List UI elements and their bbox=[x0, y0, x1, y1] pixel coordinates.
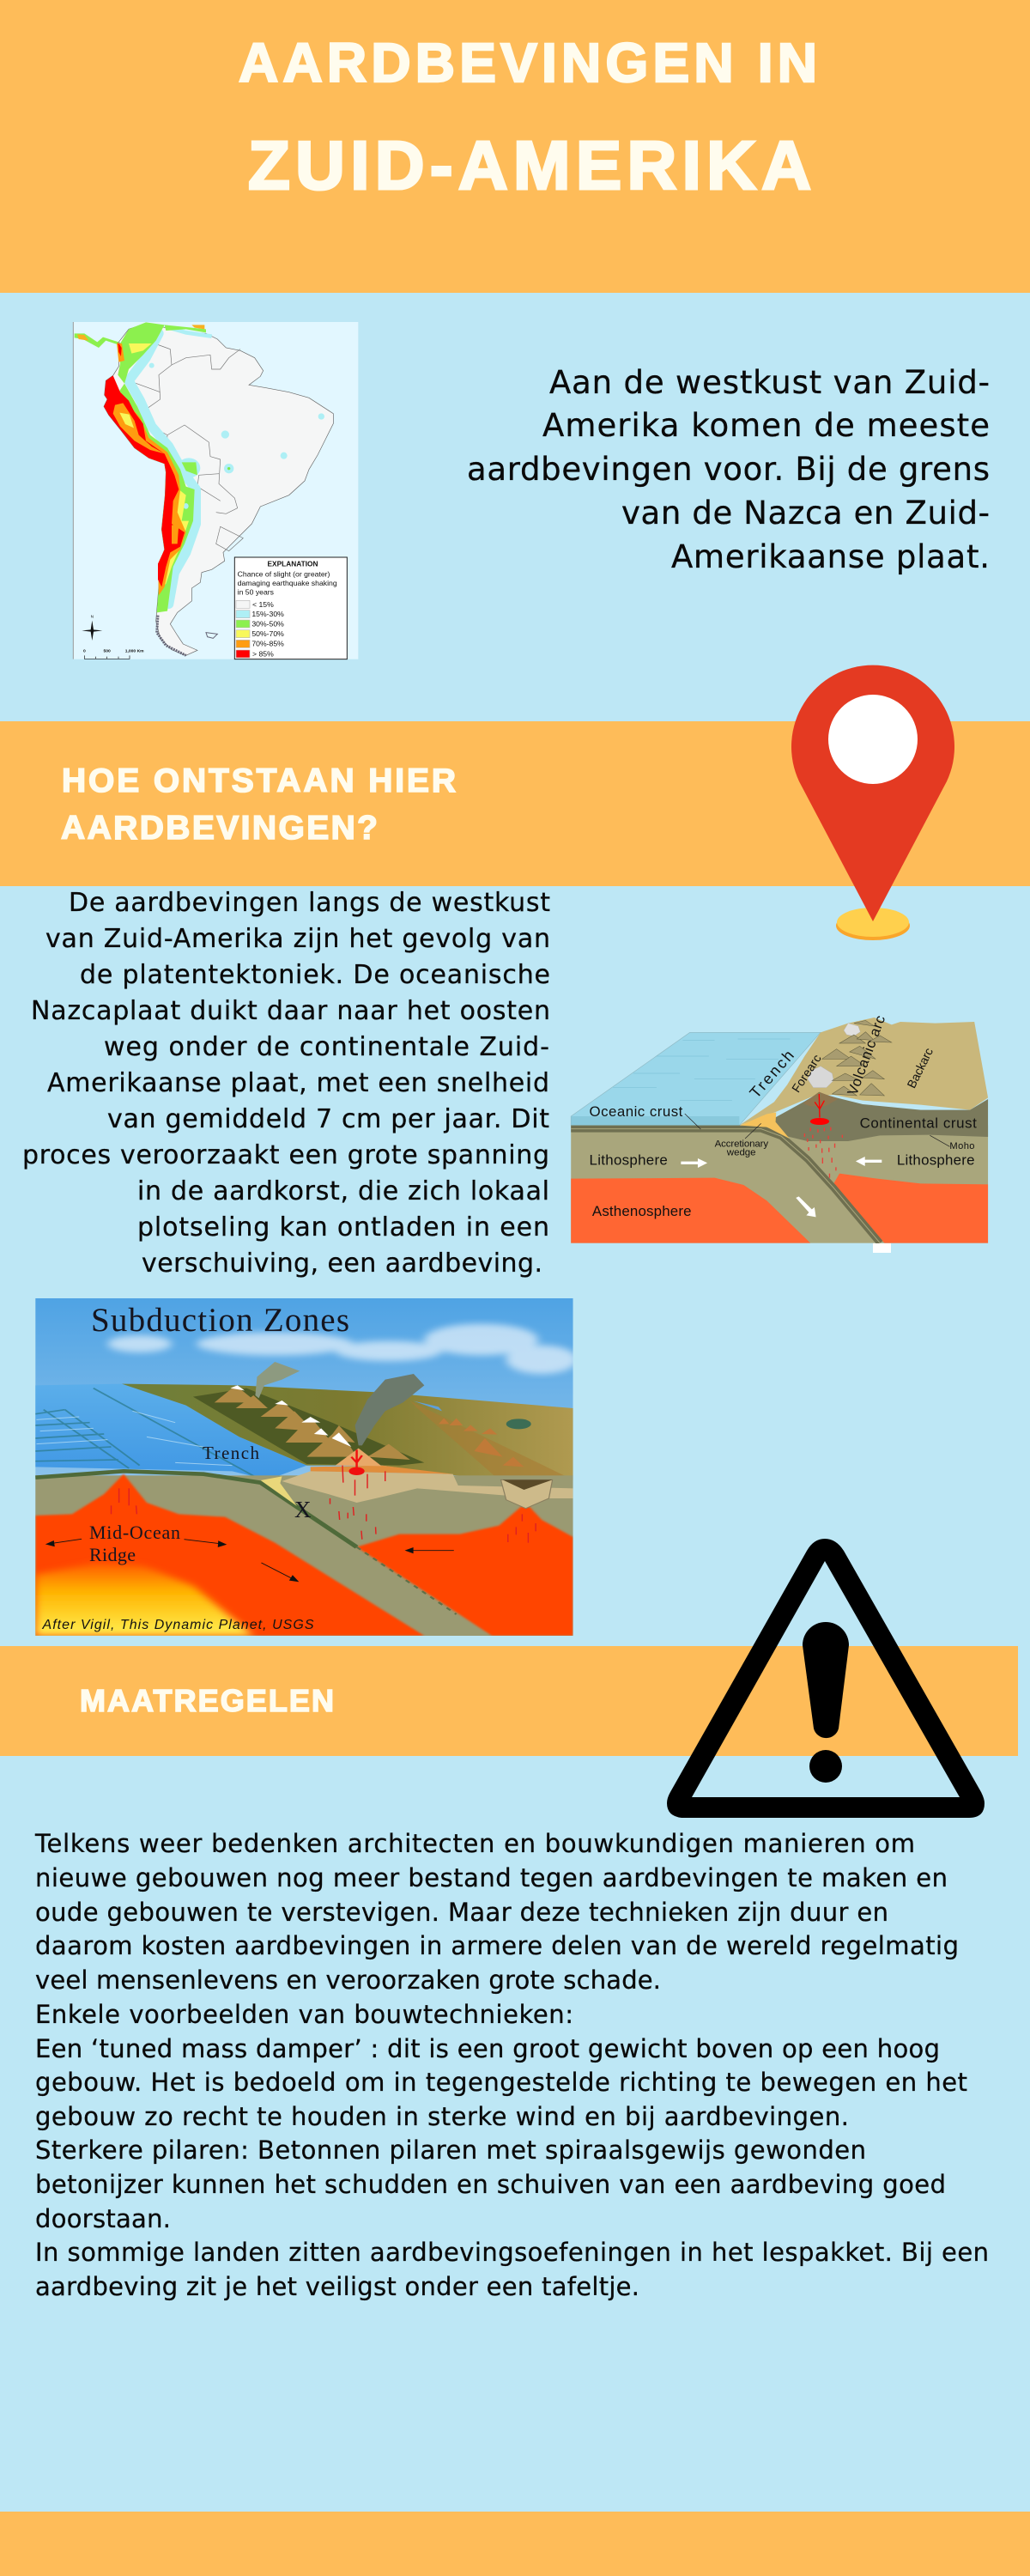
icon: location pin bbox=[791, 665, 954, 940]
volcano cone bbox=[336, 1449, 382, 1466]
hot mantle left bbox=[35, 1474, 424, 1636]
illustration labels: Ridge bbox=[89, 1544, 136, 1565]
scale bar bbox=[83, 649, 144, 659]
illustration labels: Trench bbox=[203, 1443, 259, 1463]
subduction cross-section diagram bbox=[571, 1013, 988, 1243]
mantle bbox=[35, 1475, 573, 1636]
legend box bbox=[234, 557, 347, 659]
legend box: 15%-30% bbox=[251, 610, 284, 618]
explanation paragraph: van gemiddeld 7 cm per jaar. Dit bbox=[107, 1104, 549, 1134]
header band bbox=[0, 0, 1030, 293]
ocean ridge grid bbox=[35, 1388, 261, 1479]
accretionary wedge bbox=[740, 1112, 790, 1139]
compass bbox=[82, 614, 102, 641]
intro paragraph: aardbevingen voor. Bij de grens bbox=[467, 451, 990, 488]
diagram labels: Lithosphere bbox=[590, 1152, 668, 1169]
ash clouds bbox=[808, 1066, 833, 1088]
title line 1: AARDBEVINGEN IN bbox=[239, 32, 817, 94]
continent surface bbox=[739, 1018, 988, 1126]
diagram labels: Asthenosphere bbox=[592, 1203, 692, 1219]
mountains bbox=[822, 1020, 892, 1096]
measures paragraph: daarom kosten aardbevingen in armere delen van de wereld regelmatig bbox=[35, 1931, 959, 1960]
clouds bbox=[107, 1324, 578, 1374]
mountain range bbox=[193, 1388, 424, 1466]
section heading: AARDBEVINGEN? bbox=[61, 810, 378, 847]
title line 2: ZUID-AMERIKA bbox=[248, 127, 811, 204]
cones on back-arc plain bbox=[439, 1419, 524, 1467]
white arrows bbox=[681, 1157, 882, 1217]
lithosphere bbox=[571, 1126, 988, 1243]
measures paragraph: In sommige landen zitten aardbevingsoefeningen in het lespakket. Bij een bbox=[35, 2238, 989, 2267]
seismic hazard map of South America bbox=[73, 322, 358, 659]
intro paragraph bbox=[467, 364, 990, 575]
volcanic plumes bbox=[355, 1374, 424, 1445]
accretionary wedge bbox=[261, 1476, 297, 1506]
intro paragraph: Aan de westkust van Zuid- bbox=[549, 364, 990, 401]
legend box: EXPLANATION bbox=[267, 560, 318, 568]
measures paragraph: nieuwe gebouwen nog meer bestand tegen aardbevingen te maken en bbox=[35, 1863, 948, 1893]
measures paragraph: gebouw. Het is bedoeld om in tegengestelde richting te bewegen en het bbox=[35, 2068, 967, 2097]
diagram labels: Lithosphere bbox=[897, 1152, 975, 1169]
diagram labels: Oceanic crust bbox=[590, 1103, 683, 1120]
measures paragraph: aardbeving zit je het veiligst onder een tafeltje. bbox=[35, 2272, 639, 2301]
section heading: MAATREGELEN bbox=[80, 1683, 334, 1718]
section band: hoe ontstaan bbox=[0, 721, 1030, 886]
diagram labels: Backarc bbox=[904, 1046, 936, 1091]
yellow zones bbox=[129, 343, 152, 354]
diagram labels: Trench bbox=[746, 1047, 797, 1102]
Patagonian fragments bbox=[157, 616, 186, 655]
volcano bbox=[803, 1092, 838, 1106]
legend box: > 85% bbox=[252, 650, 274, 659]
land bbox=[104, 324, 333, 655]
cyan halo bbox=[129, 333, 196, 604]
country borders bbox=[129, 343, 243, 551]
section heading bbox=[61, 762, 456, 847]
scale bar: 1,000 Km bbox=[125, 649, 144, 654]
explanation paragraph: verschuiving, een aardbeving. bbox=[142, 1249, 542, 1279]
icon: warning triangle bbox=[667, 1539, 985, 1818]
green zones bbox=[118, 322, 165, 384]
scale bar: 0 bbox=[83, 649, 86, 654]
intro paragraph: Amerika komen de meeste bbox=[542, 407, 990, 444]
measures paragraph: doorstaan. bbox=[35, 2204, 171, 2233]
asthenosphere bbox=[571, 1178, 810, 1243]
land bbox=[122, 1384, 573, 1479]
section band: maatregelen bbox=[0, 1646, 1018, 1756]
explanation paragraph: Amerikaanse plaat, met een snelheid bbox=[47, 1068, 549, 1098]
measures paragraph: Een ‘tuned mass damper’ : dit is een groot gewicht boven op een hoog bbox=[35, 2034, 940, 2063]
diagram labels: Moho bbox=[949, 1141, 975, 1151]
diagram labels: Forearc bbox=[789, 1052, 824, 1095]
compass: N bbox=[91, 614, 94, 618]
legend box: Chance of slight (or greater) bbox=[238, 569, 330, 578]
small white rectangle under diagram bbox=[873, 1243, 891, 1253]
continental crust bbox=[775, 1093, 988, 1141]
illustration labels: After Vigil, This Dynamic Planet, USGS bbox=[41, 1618, 314, 1632]
measures paragraph: gebouw zo recht te houden in sterke wind en bij aardbevingen. bbox=[35, 2102, 849, 2131]
explanation paragraph: weg onder de continentale Zuid- bbox=[104, 1032, 549, 1062]
diagram labels bbox=[590, 1013, 977, 1219]
measures paragraph: betonijzer kunnen het schudden en schuiven van een aardbeving goed bbox=[35, 2170, 946, 2199]
legend box: 70%-85% bbox=[251, 640, 284, 648]
diagram labels: Volcanic arc bbox=[844, 1013, 888, 1097]
illustration labels: X bbox=[294, 1497, 312, 1522]
illustration labels: Mid-Ocean bbox=[89, 1522, 180, 1543]
section heading: HOE ONTSTAAN HIER bbox=[62, 762, 456, 799]
crust strip bbox=[35, 1471, 357, 1547]
scale bar: 500 bbox=[104, 649, 111, 654]
oceanic crust strip bbox=[571, 1129, 880, 1243]
measures paragraph: Enkele voorbeelden van bouwtechnieken: bbox=[35, 2000, 573, 2029]
explanation paragraph: proces veroorzaakt een grote spanning bbox=[22, 1140, 549, 1170]
footer band bbox=[0, 2512, 1030, 2576]
illustration labels bbox=[41, 1302, 349, 1632]
explanation paragraph: De aardbevingen langs de westkust bbox=[69, 888, 550, 918]
illustration labels: Subduction Zones bbox=[91, 1302, 349, 1339]
legend box: 30%-50% bbox=[251, 619, 284, 628]
explanation paragraph: van Zuid-Amerika zijn het gevolg van bbox=[45, 924, 550, 954]
legend box: damaging earthquake shaking bbox=[238, 579, 337, 587]
black arrows bbox=[46, 1539, 454, 1582]
measures paragraph: Sterkere pilaren: Betonnen pilaren met spiraalsgewijs gewonden bbox=[35, 2136, 866, 2165]
orange zones bbox=[123, 398, 186, 595]
explanation paragraph bbox=[22, 888, 550, 1279]
leader lines bbox=[685, 1114, 949, 1146]
ocean bbox=[35, 1384, 307, 1479]
red zones bbox=[104, 375, 185, 586]
legend box: 50%-70% bbox=[251, 629, 284, 638]
explanation paragraph: plotseling kan ontladen in een bbox=[137, 1212, 549, 1242]
measures paragraph: veel mensenlevens en veroorzaken grote schade. bbox=[35, 1965, 661, 1995]
measures paragraph: oude gebouwen te verstevigen. Maar deze technieken zijn duur en bbox=[35, 1898, 888, 1927]
back-arc basin bbox=[500, 1479, 553, 1509]
diagram labels: Continental crust bbox=[860, 1115, 977, 1131]
explanation paragraph: de platentektoniek. De oceanische bbox=[80, 960, 550, 990]
measures paragraph bbox=[34, 1829, 989, 2301]
continental crust bbox=[282, 1471, 573, 1503]
orange and yellow inside Peru bbox=[113, 403, 165, 453]
legend box: in 50 years bbox=[238, 588, 275, 597]
diagram labels: wedge bbox=[726, 1148, 756, 1158]
subduction zones illustration bbox=[35, 1298, 578, 1636]
intro paragraph: van de Nazca en Zuid- bbox=[621, 495, 990, 532]
diagram labels: Accretionary bbox=[715, 1139, 768, 1150]
ocean bbox=[571, 1032, 821, 1126]
magma dashes bbox=[112, 1466, 536, 1543]
hot mantle right bbox=[357, 1503, 573, 1636]
intro paragraph: Amerikaanse plaat. bbox=[671, 538, 990, 575]
measures paragraph: Telkens weer bedenken architecten en bouwkundigen manieren om bbox=[34, 1829, 915, 1858]
explanation paragraph: Nazcaplaat duikt daar naar het oosten bbox=[31, 996, 550, 1026]
explanation paragraph: in de aardkorst, die zich lokaal bbox=[137, 1176, 549, 1206]
legend box: < 15% bbox=[252, 600, 274, 609]
